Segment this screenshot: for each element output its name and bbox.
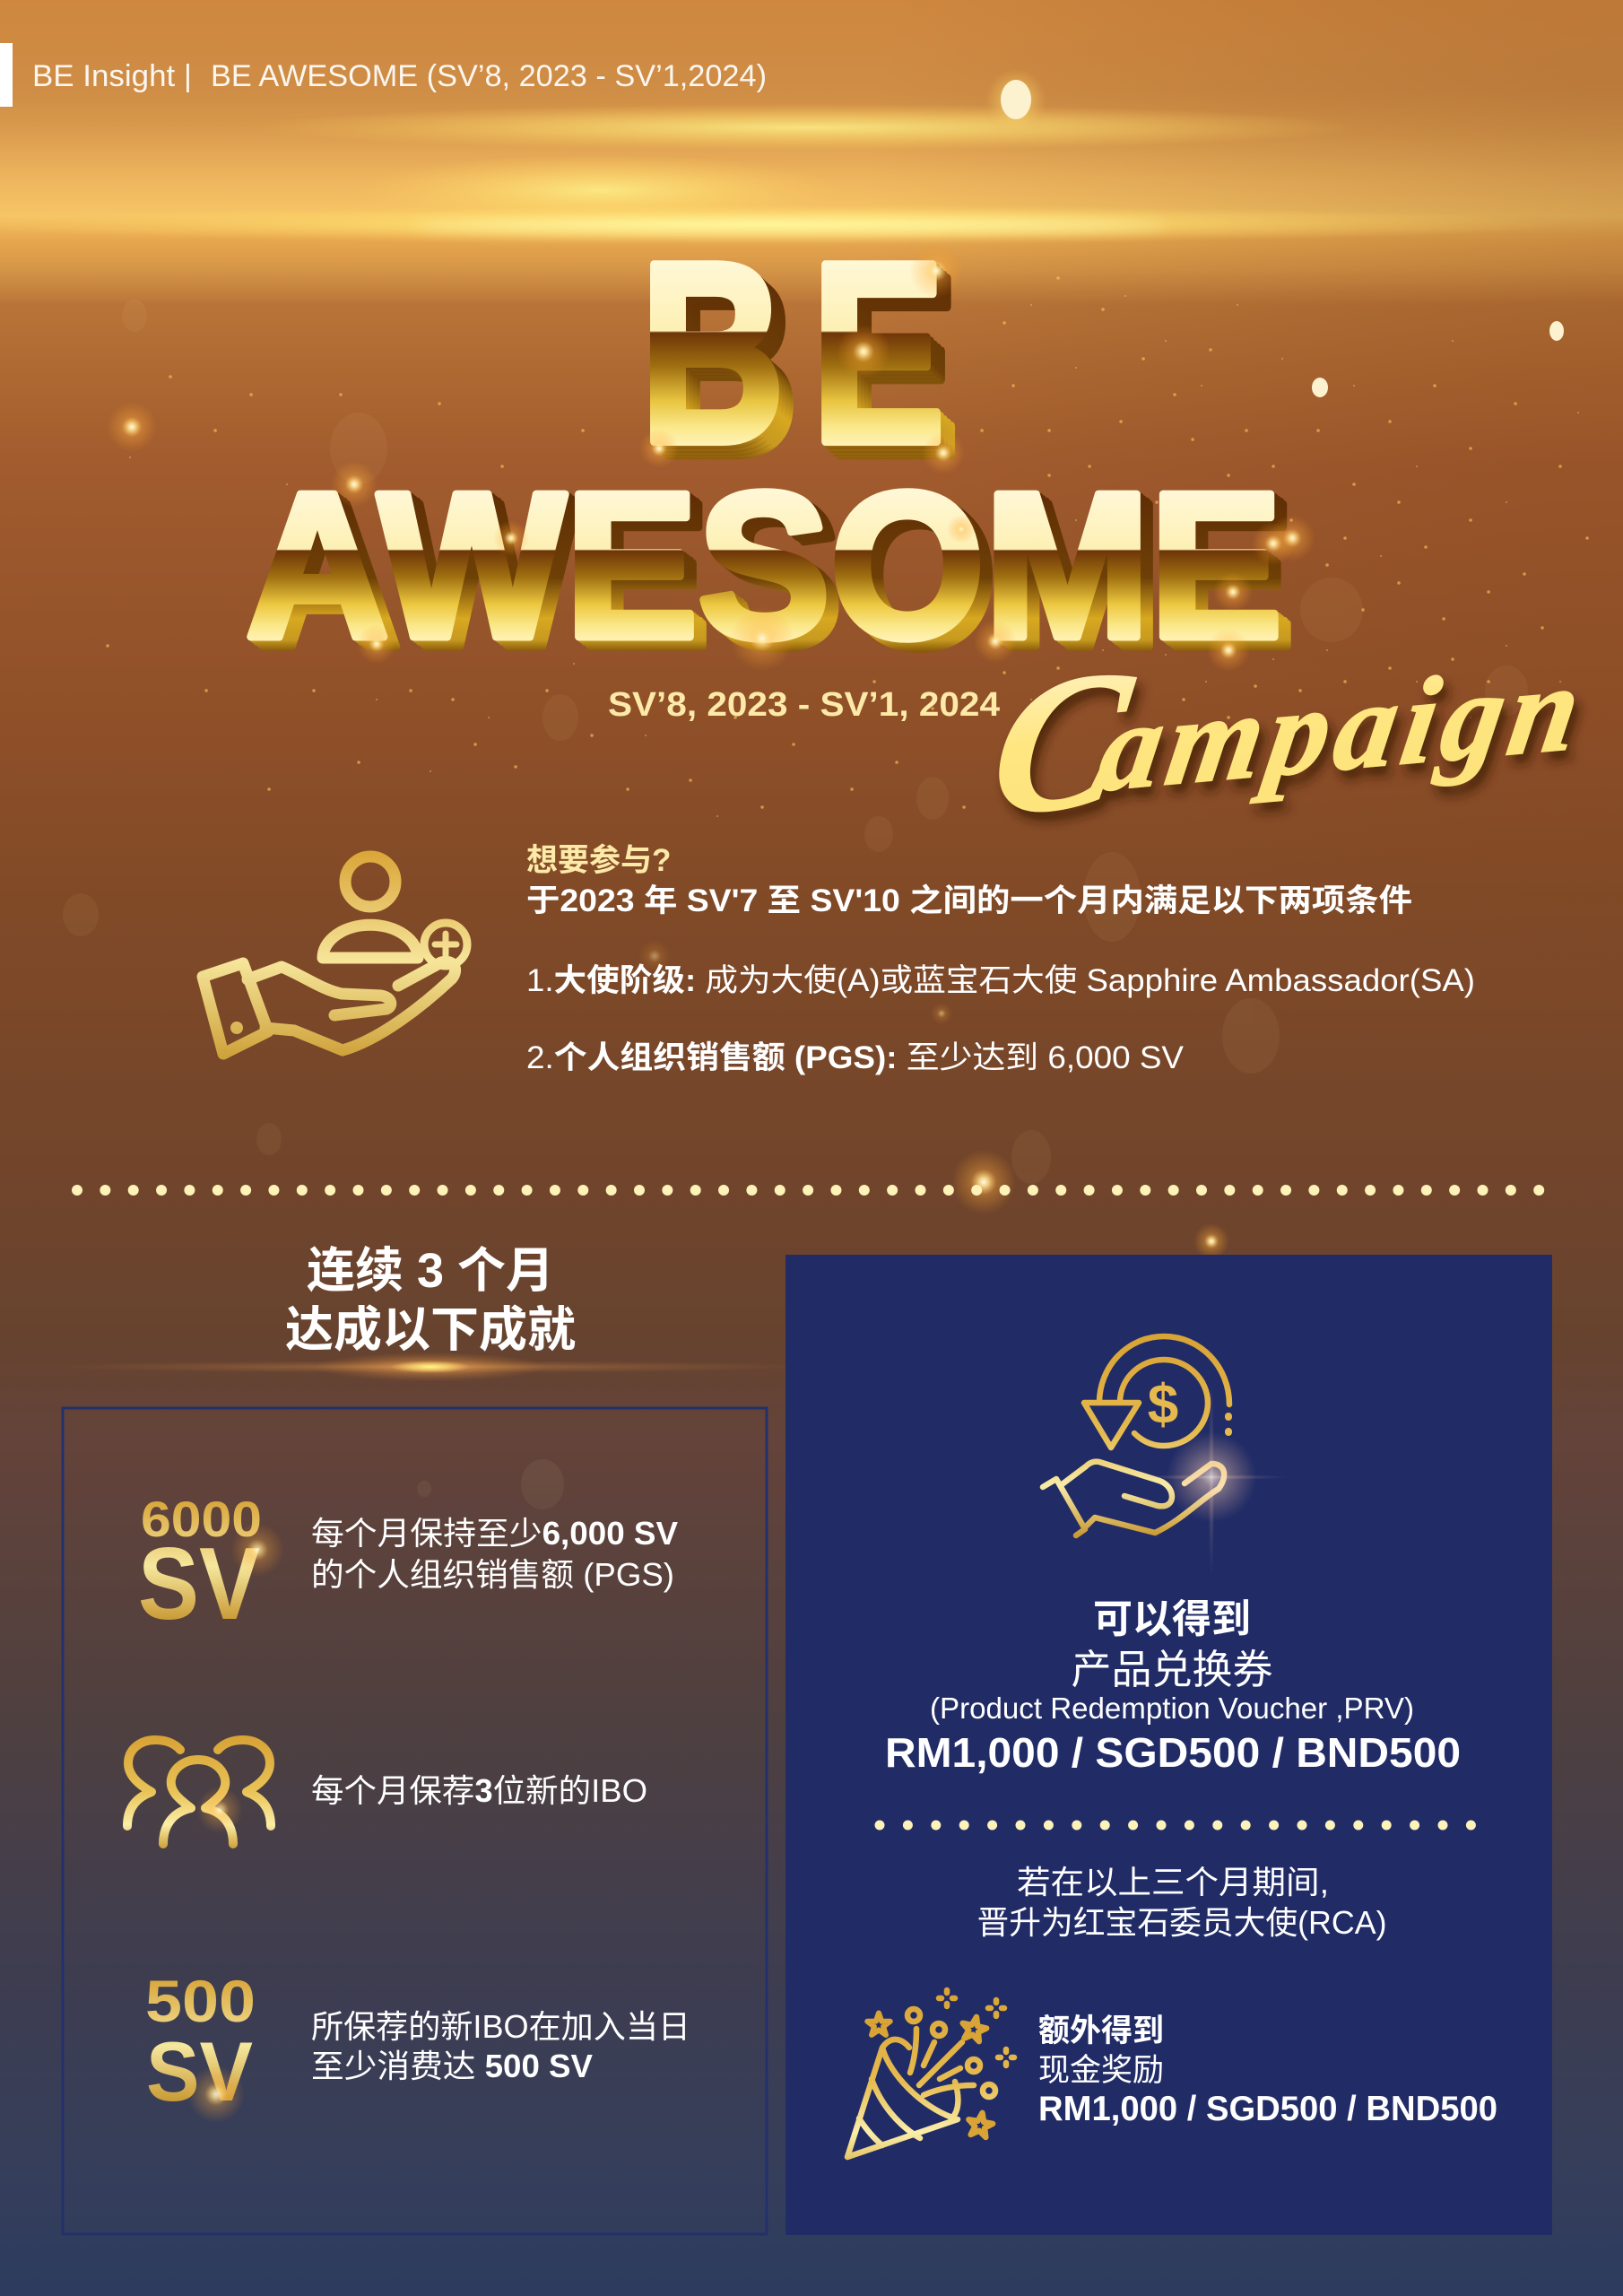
requirement 1 text (311, 1515, 678, 1593)
500 SV badge: 500 (145, 1968, 256, 2034)
icon: three people (127, 1740, 271, 1844)
6000 SV badge: SV (138, 1527, 260, 1641)
reward text: RM1,000 / SGD500 / BND500 (885, 1729, 1461, 1776)
bonus text: 现金奖励 (1038, 2053, 1164, 2088)
header text: BE AWESOME (SV’8, 2023 - SV’1,2024) (211, 59, 767, 93)
title: AWESOME: AWESOME (256, 457, 1292, 688)
reward text: 可以得到 (1093, 1597, 1251, 1641)
title: BE: BE (640, 210, 945, 496)
dotted divider (77, 1185, 1542, 1196)
participation text: 想要参与? (526, 843, 671, 878)
title: BE: BE (655, 223, 959, 509)
reward text: 产品兑换券 (1071, 1647, 1273, 1692)
500 SV badge (145, 1968, 256, 2123)
reward text: (Product Redemption Voucher ,PRV) (930, 1692, 1414, 1725)
icon: hand holding person (203, 857, 467, 1054)
coin dollar: $ (1148, 1374, 1178, 1436)
campaign dates: SV’8, 2023 - SV’1, 2024 (608, 686, 1000, 724)
campaign script word: ampaign (1091, 638, 1595, 817)
dotted divider (880, 1821, 1475, 1830)
title: AWESOME: AWESOME (249, 452, 1286, 683)
lens flare (1135, 1381, 1288, 1578)
title: AWESOME: AWESOME (246, 449, 1282, 681)
heading: three months: 达成以下成就 (285, 1303, 576, 1357)
title sparkles (107, 69, 1564, 1259)
requirement 2 text: 每个月保荐3位新的IBO (311, 1772, 647, 1809)
panel: rewards (785, 1255, 1552, 2235)
requirement 3 text: 所保荐的新IBO在加入当日 (311, 2008, 690, 2045)
heading glow line (45, 1352, 816, 1381)
campaign script word: C (979, 629, 1144, 857)
title: BE: BE (651, 221, 956, 507)
requirement 3 text: 至少消费达 500 SV (311, 2048, 593, 2084)
participation text (526, 843, 1475, 1075)
icon: hand with coin (1043, 1336, 1229, 1535)
header tab (0, 43, 13, 107)
title: BE: BE (644, 213, 949, 500)
bonus text: 额外得到 (1038, 2013, 1164, 2048)
icon: party popper (847, 1990, 1014, 2157)
requirement 1 text: 的个人组织销售额 (PGS) (311, 1556, 674, 1593)
requirement 3 text (311, 2008, 690, 2084)
header text: BE Insight | (32, 59, 192, 93)
promotion note: 若在以上三个月期间, (1017, 1864, 1329, 1900)
participation text: 于2023 年 SV'7 至 SV'10 之间的一个月内满足以下两项条件 (526, 883, 1412, 918)
campaign script word (979, 588, 1603, 857)
title: AWESOME: AWESOME (252, 454, 1289, 685)
title: AWESOME: AWESOME (258, 459, 1295, 691)
heading: three months: 连续 3 个月 (307, 1244, 554, 1298)
reward text (885, 1597, 1461, 1776)
panel: requirements (63, 1408, 767, 2234)
bonus text: RM1,000 / SGD500 / BND500 (1038, 2090, 1497, 2128)
heading: three months (285, 1244, 576, 1357)
participation text: 1.大使阶级: 成为大使(A)或蓝宝石大使 Sapphire Ambassador(SA) (526, 963, 1475, 998)
promotion note (977, 1864, 1386, 1941)
bonus text (1038, 2013, 1497, 2128)
promotion note: 晋升为红宝石委员大使(RCA) (977, 1904, 1386, 1941)
6000 SV badge: 6000 (141, 1491, 262, 1547)
title: BE: BE (647, 217, 952, 503)
participation text: 2.个人组织销售额 (PGS): 至少达到 6,000 SV (526, 1040, 1185, 1075)
requirement 1 text: 每个月保持至少6,000 SV (311, 1515, 678, 1552)
500 SV badge: SV (146, 2024, 253, 2118)
